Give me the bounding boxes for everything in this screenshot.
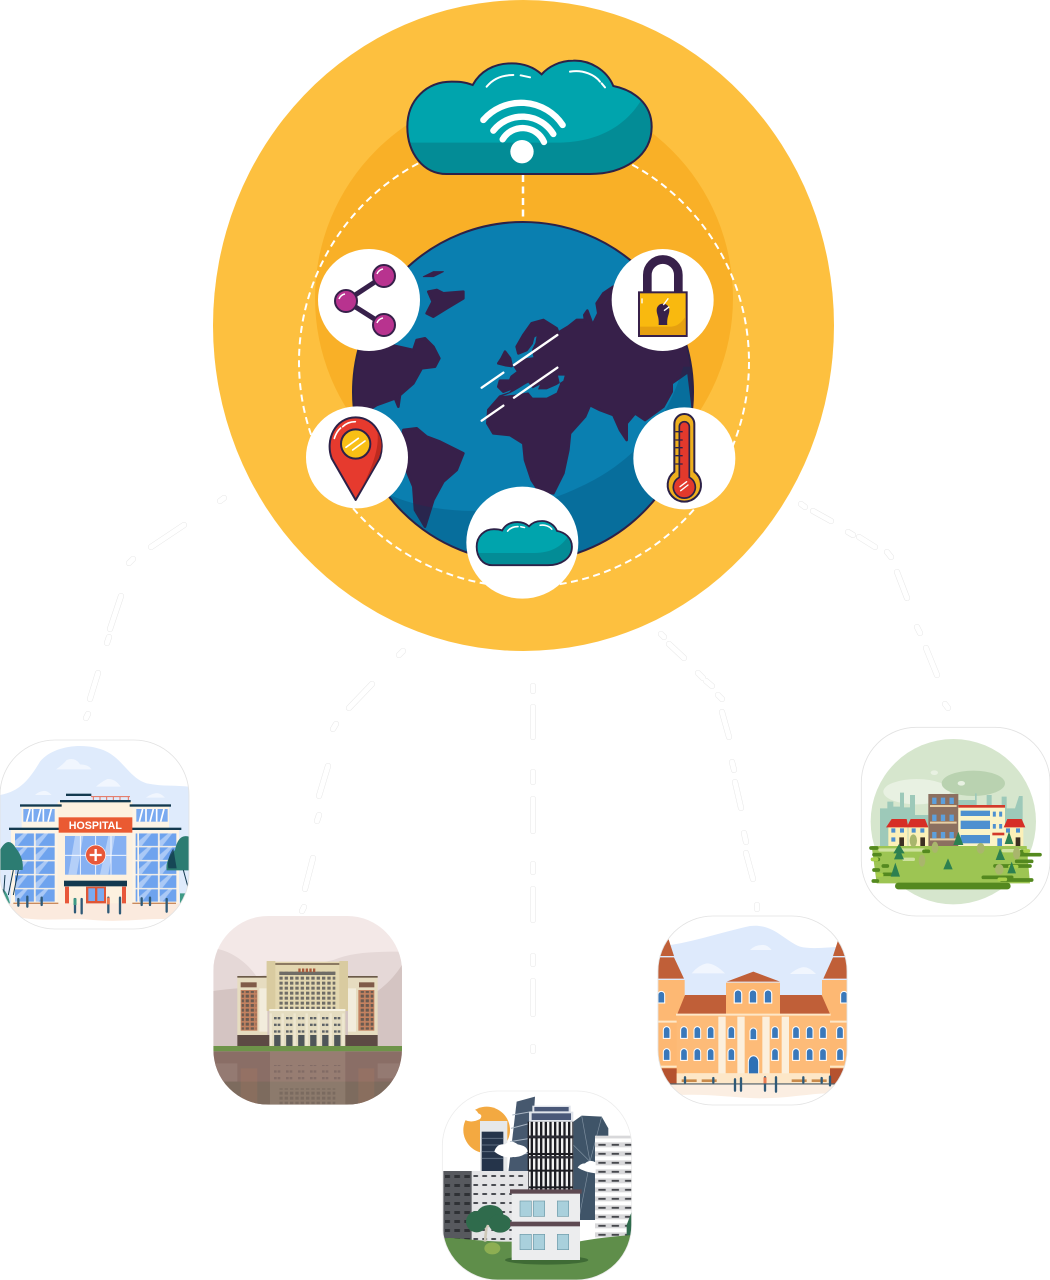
tree and bush bbox=[484, 1225, 490, 1242]
icon: map pin bbox=[306, 406, 408, 508]
brown apartment block bbox=[928, 794, 958, 846]
panel: city tile bbox=[442, 1091, 632, 1280]
globe shadow crescent bbox=[390, 366, 692, 552]
college windows bbox=[658, 990, 847, 1060]
icon: padlock bbox=[612, 249, 714, 351]
skyline bbox=[880, 793, 1023, 847]
dashed connector: cloud to globe bbox=[522, 175, 524, 222]
right slab tower bbox=[595, 1136, 632, 1237]
panel: college tile bbox=[658, 916, 847, 1105]
hospital sign bbox=[59, 817, 132, 833]
college main hall bbox=[677, 972, 830, 1014]
towers bbox=[508, 1097, 535, 1172]
hospital wings bbox=[11, 830, 58, 904]
water reflection bbox=[241, 1052, 374, 1104]
dashed orbit ring bbox=[299, 137, 749, 587]
panel: hospital tile bbox=[0, 740, 189, 929]
cream office block bbox=[958, 806, 1005, 846]
clouds bbox=[466, 1110, 596, 1174]
continents bbox=[354, 271, 692, 528]
central tower bbox=[267, 962, 348, 1010]
houses bbox=[888, 827, 908, 846]
benches and people bbox=[682, 1079, 827, 1082]
lawn bbox=[872, 846, 1030, 883]
icon: small cloud bbox=[466, 487, 578, 599]
icon: wifi cloud bbox=[403, 61, 660, 177]
front building bbox=[505, 1257, 588, 1265]
icon: share nodes bbox=[318, 249, 420, 351]
icon: thermometer bbox=[633, 407, 735, 509]
building wings bbox=[238, 978, 268, 1035]
panel: village tile bbox=[861, 727, 1050, 916]
panel: government building tile bbox=[213, 916, 402, 1105]
college towers bbox=[658, 939, 847, 979]
inner amber circle bbox=[315, 89, 733, 507]
glare streaks bbox=[482, 335, 557, 421]
low-rise blocks bbox=[443, 1171, 473, 1246]
panel: hospital tile: HOSPITAL bbox=[69, 820, 122, 832]
central skyscraper bbox=[528, 1122, 573, 1192]
trees bbox=[891, 832, 1016, 877]
dashed connector paths to buildings bbox=[86, 498, 948, 1051]
people bbox=[18, 897, 167, 913]
globe bbox=[352, 221, 694, 554]
panel: yellow hub circle bbox=[213, 0, 834, 651]
trees bbox=[0, 842, 23, 870]
